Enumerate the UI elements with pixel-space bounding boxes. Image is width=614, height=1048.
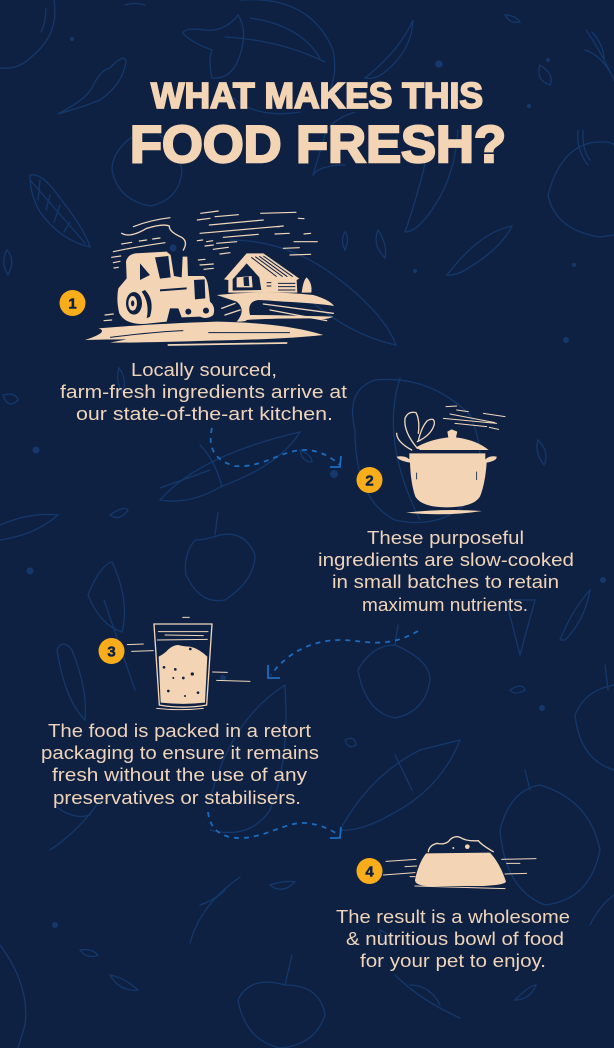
badge 3 xyxy=(98,638,124,664)
arrow: step 2 to step 3 xyxy=(268,631,418,678)
smoke and wind streaks xyxy=(104,211,317,321)
badge 1 xyxy=(60,290,86,316)
fields xyxy=(217,292,334,322)
pot body xyxy=(397,453,497,507)
text: step 2: in small batches to retain xyxy=(332,572,559,592)
text: step 3: fresh without the use of any xyxy=(52,765,307,785)
text: step 2 xyxy=(318,528,574,615)
text: step 4: The result is a wholesome xyxy=(336,907,570,927)
title: WHAT MAKES THIS xyxy=(151,75,483,116)
illustration: retort food pack xyxy=(127,617,250,710)
arrow: step 3 to step 4 xyxy=(208,812,341,838)
text: step 3 xyxy=(41,721,319,808)
text: step 2: These purposeful xyxy=(367,528,524,548)
badge 4: 4 xyxy=(365,864,374,880)
arrow: step 1 to step 2 xyxy=(211,428,341,467)
text: step 1: Locally sourced, xyxy=(131,360,277,380)
steam xyxy=(397,412,434,450)
badge 3: 3 xyxy=(107,644,116,660)
badge 2: 2 xyxy=(365,472,374,490)
ground xyxy=(85,322,323,343)
lid xyxy=(416,429,489,450)
food filling xyxy=(159,645,207,704)
text: step 4 xyxy=(336,907,570,971)
text: step 1: farm-fresh ingredients arrive at xyxy=(60,382,347,402)
text: step 3: packaging to ensure it remains xyxy=(41,743,319,763)
title xyxy=(130,75,506,174)
text: step 4: for your pet to enjoy. xyxy=(360,951,546,971)
text: step 1 xyxy=(60,360,347,424)
text: step 2: maximum nutrients. xyxy=(362,595,528,615)
text: step 3: preservatives or stabilisers. xyxy=(53,788,301,808)
title: FOOD FRESH? xyxy=(130,116,506,174)
badge 2 xyxy=(356,467,382,493)
farmhouse xyxy=(224,253,312,293)
illustration: tractor and farmhouse xyxy=(85,211,334,345)
illustration: food bowl xyxy=(383,837,536,889)
badge 1: 1 xyxy=(68,296,77,312)
text: step 1: our state-of-the-art kitchen. xyxy=(76,404,333,424)
text: step 4: & nutritious bowl of food xyxy=(346,929,564,949)
badge 4 xyxy=(356,858,382,884)
tractor xyxy=(117,252,214,324)
text: step 3: The food is packed in a retort xyxy=(48,721,311,741)
illustration: cooking pot xyxy=(397,406,505,514)
text: step 2: ingredients are slow-cooked xyxy=(318,550,574,570)
